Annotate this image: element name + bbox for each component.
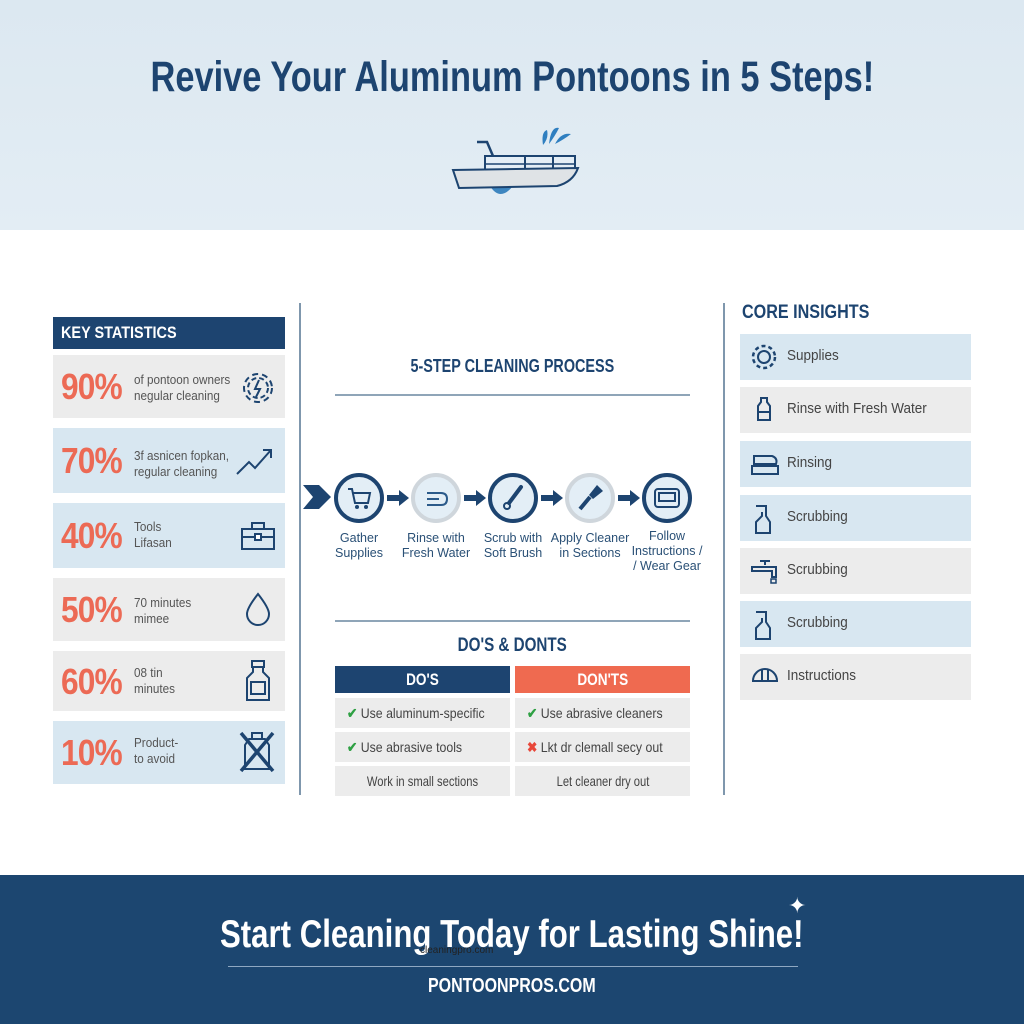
arrow 3 bbox=[541, 490, 563, 506]
heading: key statistics bbox=[53, 317, 285, 349]
header band bbox=[0, 0, 1024, 230]
stat 90%: 90% bbox=[61, 366, 122, 407]
stat 90% bbox=[53, 355, 285, 418]
text: Scrubbing bbox=[787, 614, 848, 631]
panel: do's and don'ts: ✖ Lkt dr clemall secy out bbox=[527, 739, 663, 755]
panel: do's and don'ts: ✔ Use aluminum-specific bbox=[347, 705, 485, 721]
divider lines bbox=[299, 303, 301, 795]
heading: 5-step process: 5-STEP CLEANING PROCESS bbox=[411, 356, 614, 376]
heading: dos and donts: DO'S & DONTS bbox=[458, 635, 567, 656]
stat 50%: 70 minutes bbox=[134, 595, 191, 610]
footer headline: Start Cleaning Today for Lasting Shine! bbox=[220, 913, 804, 956]
stat 40%: Tools bbox=[134, 519, 161, 534]
icon: pontoon boat bbox=[452, 128, 580, 194]
step labels: Supplies bbox=[335, 546, 383, 560]
small watermark text: cleaningpro.com bbox=[420, 945, 493, 956]
step labels: Scrub with bbox=[484, 531, 542, 545]
step 1 icon: cart bbox=[334, 473, 384, 523]
stat 10%: to avoid bbox=[134, 751, 175, 766]
arrow 1 bbox=[387, 490, 409, 506]
stat 70%: 70% bbox=[61, 440, 122, 481]
step 5 icon: goggles bbox=[642, 473, 692, 523]
stat 40%: Lifasan bbox=[134, 535, 172, 550]
stat 10%: 10% bbox=[61, 732, 122, 773]
text: Scrubbing bbox=[787, 508, 848, 525]
heading: key statistics: KEY STATISTICS bbox=[61, 323, 177, 342]
panel: do's and don'ts: DON'TS bbox=[577, 670, 628, 689]
icon: sparkle: ✦ bbox=[788, 893, 806, 918]
panel: do's and don'ts: DO'S bbox=[406, 670, 439, 689]
step 2 icon: hose bbox=[411, 473, 461, 523]
stat 90%: negular cleaning bbox=[134, 388, 220, 403]
stat 60%: 08 tin bbox=[134, 665, 163, 680]
step labels: Follow bbox=[649, 529, 685, 543]
text: Scrubbing bbox=[787, 561, 848, 578]
step labels: Rinse with bbox=[407, 531, 465, 545]
heading: core insights: CORE INSIGHTS bbox=[742, 302, 869, 323]
text: Supplies bbox=[787, 347, 839, 364]
step labels: / Wear Gear bbox=[633, 559, 701, 573]
step 4 icon: scraper bbox=[565, 473, 615, 523]
arrow 2 bbox=[464, 490, 486, 506]
stat 60% bbox=[53, 651, 285, 711]
stat 50%: mimee bbox=[134, 611, 169, 626]
stat 10%: Product- bbox=[134, 735, 178, 750]
stat 90%: of pontoon owners bbox=[134, 372, 230, 387]
arrow 4 bbox=[618, 490, 640, 506]
stat 70% bbox=[53, 428, 285, 493]
arrow: start chevron bbox=[303, 485, 331, 509]
stat 50% bbox=[53, 578, 285, 641]
step labels: Fresh Water bbox=[402, 546, 470, 560]
step 3 icon: brush bbox=[488, 473, 538, 523]
step labels: in Sections bbox=[559, 546, 621, 560]
stat 40%: 40% bbox=[61, 515, 122, 556]
stat 40% bbox=[53, 503, 285, 568]
stat 60%: 60% bbox=[61, 661, 122, 702]
stat 50%: 50% bbox=[61, 589, 122, 630]
footer url: PONTOONPROS.COM bbox=[428, 975, 596, 997]
step labels bbox=[335, 529, 702, 573]
text: Instructions bbox=[787, 667, 856, 684]
stat 70%: 3f asnicen fopkan, bbox=[134, 448, 229, 463]
step labels: Instructions / bbox=[632, 544, 702, 558]
step labels: Gather bbox=[340, 531, 378, 545]
panel: do's and don'ts: Work in small sections bbox=[367, 773, 478, 789]
stat 60%: minutes bbox=[134, 681, 175, 696]
text: Rinse with Fresh Water bbox=[787, 400, 927, 417]
panel: do's and don'ts bbox=[335, 635, 690, 796]
footer band bbox=[0, 875, 1024, 1024]
panel: do's and don'ts: ✔ Use abrasive tools bbox=[347, 739, 462, 755]
panel: do's and don'ts: Let cleaner dry out bbox=[556, 773, 649, 789]
step labels: Soft Brush bbox=[484, 546, 542, 560]
step labels: Apply Cleaner bbox=[551, 531, 629, 545]
panel: do's and don'ts: ✔ Use abrasive cleaners bbox=[527, 705, 663, 721]
stat 70%: regular cleaning bbox=[134, 464, 217, 479]
title: Revive Your Aluminum Pontoons in 5 Steps! bbox=[150, 53, 874, 101]
stat 10% bbox=[53, 721, 285, 784]
text: Rinsing bbox=[787, 454, 832, 471]
